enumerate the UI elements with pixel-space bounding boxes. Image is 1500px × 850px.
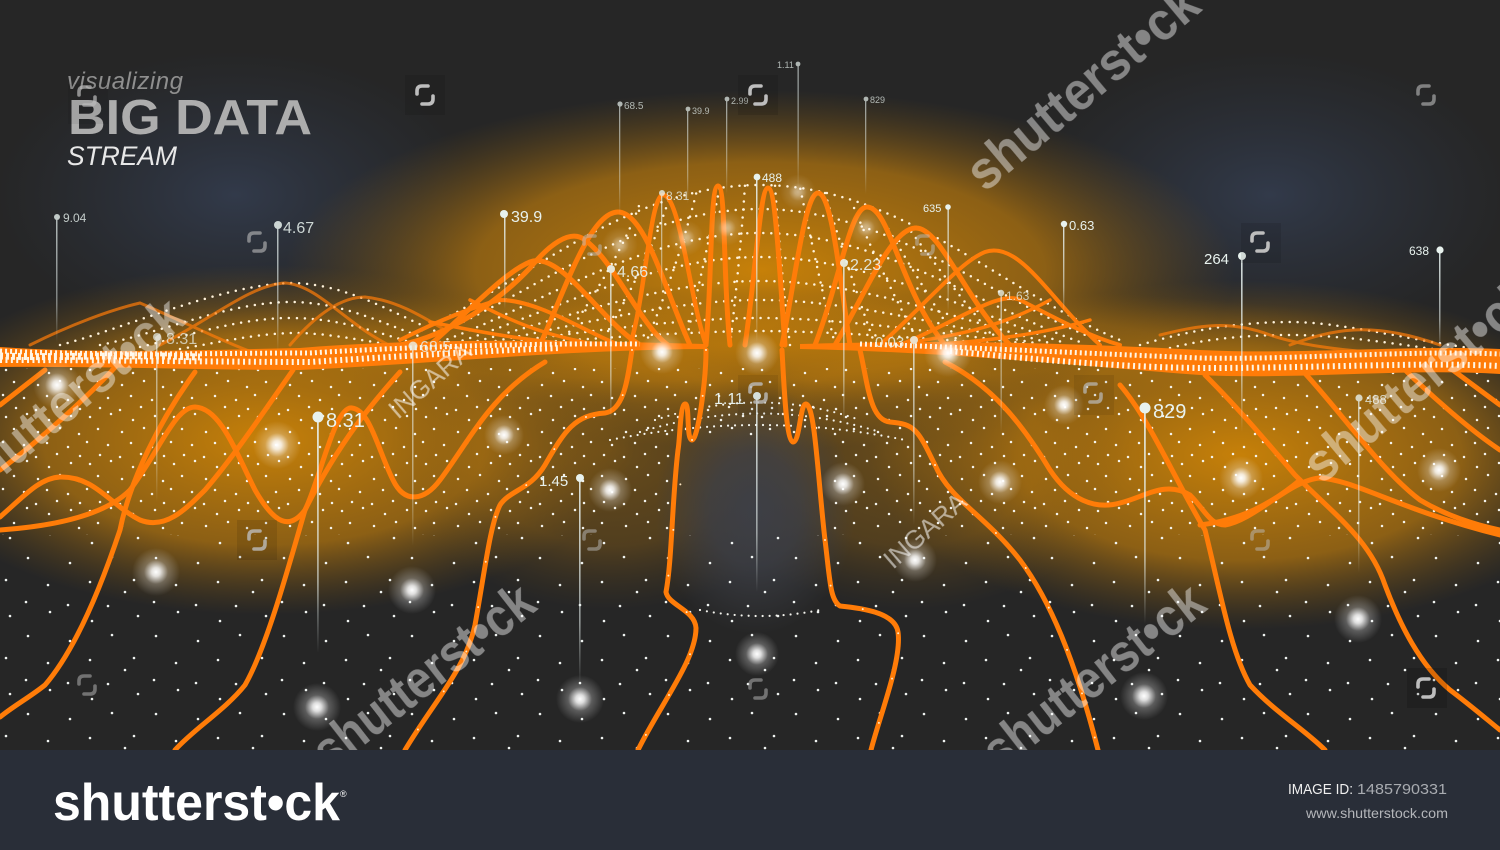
pin 8.31 dome	[659, 189, 690, 294]
pin 2.99: 2.99	[731, 96, 749, 106]
pin 4.67	[274, 220, 314, 351]
pin 829 top	[864, 95, 885, 194]
pin 1.11 centre: 1.11	[714, 391, 744, 408]
pin 1.63: 1.63	[1006, 289, 1030, 303]
pin 2.99	[725, 96, 749, 194]
title	[67, 68, 312, 171]
glow: horizon	[50, 285, 1450, 405]
pin 1.11 top: 1.11	[777, 60, 794, 70]
pin 488 right	[1355, 392, 1387, 573]
pin 0.03: 0.03	[875, 334, 904, 351]
ground dots	[0, 368, 1500, 750]
pin 8.31 left: 8.31	[166, 331, 197, 348]
image id number: 1485790331	[1357, 781, 1447, 798]
pin 638	[1409, 244, 1444, 350]
watermark bottom centre-right: shutterst•ck	[970, 571, 1217, 781]
pin 4.66	[607, 264, 648, 420]
ground wave lines	[0, 350, 1500, 750]
pin 635	[923, 203, 951, 312]
pin 488 right: 488	[1365, 392, 1387, 407]
pin 39.9 top: 39.9	[692, 106, 710, 116]
glow: centre-right ground	[690, 290, 1130, 610]
pin 264	[1204, 251, 1246, 432]
pin 68.5 top	[617, 101, 644, 215]
pin 4.67: 4.67	[283, 220, 314, 237]
horizon band	[0, 341, 1500, 376]
pin 8.31 left	[153, 331, 197, 502]
title: stream: STREAM	[67, 141, 177, 171]
pin 8.31 large: 8.31	[326, 410, 365, 432]
title: big data: BIG DATA	[68, 91, 312, 145]
title: visualizing: visualizing	[67, 68, 184, 95]
pin 1.63	[998, 289, 1030, 433]
pin 9.04: 9.04	[63, 211, 87, 225]
dome wave lines	[30, 186, 1440, 355]
pin 1.45	[539, 473, 584, 684]
pin 264: 264	[1204, 251, 1229, 268]
pin 638: 638	[1409, 244, 1429, 258]
glow: blue left	[0, 50, 475, 340]
ingara right: INGARA	[877, 486, 973, 575]
pin 68.5 top: 68.5	[624, 101, 644, 112]
pin 1.11 top	[777, 60, 800, 189]
glow: left ground	[0, 265, 635, 615]
pin 829 large: 829	[1153, 401, 1186, 423]
pin 8.31 dome: 8.31	[666, 189, 690, 203]
pin 1.45: 1.45	[539, 473, 568, 490]
footer logo: shutterst•ck	[53, 774, 340, 832]
dome dots	[60, 185, 1470, 350]
ingara left: INGARA	[382, 336, 478, 425]
registered mark: ®	[340, 789, 347, 799]
pin 0.03	[875, 334, 918, 525]
watermark logo marks	[68, 75, 1447, 708]
glow: centre ground	[390, 290, 830, 610]
line dots	[405, 350, 1098, 750]
footer bar	[0, 750, 1500, 850]
pin 1.11 centre	[714, 391, 761, 592]
pin 68.5	[408, 339, 451, 546]
pin 829 top: 829	[870, 95, 885, 105]
glow: blue right	[1030, 50, 1500, 340]
pin 39.9	[500, 209, 542, 309]
pin 488: 488	[762, 171, 782, 185]
pin 4.66: 4.66	[617, 264, 648, 281]
data pins	[54, 60, 1444, 684]
glow: dome	[285, 90, 1235, 450]
pin 2.23	[840, 257, 881, 424]
pin 2.23: 2.23	[850, 257, 881, 274]
glowing points	[33, 174, 1461, 731]
pin 0.63: 0.63	[1069, 218, 1094, 233]
pin 0.63	[1061, 218, 1094, 314]
pin 829 large	[1140, 401, 1186, 624]
ingara watermarks	[382, 336, 973, 575]
pin 8.31 large	[312, 410, 365, 653]
glow: dark centre gap	[655, 385, 855, 635]
pin 39.9: 39.9	[511, 209, 542, 226]
pin 68.5: 68.5	[420, 339, 451, 356]
website: www.shutterstock.com	[1305, 805, 1448, 821]
pin 635: 635	[923, 203, 941, 215]
image id label: IMAGE ID:	[1288, 781, 1353, 798]
pin 9.04	[54, 211, 87, 342]
pin 39.9 top	[686, 106, 710, 204]
watermark bottom centre-left: shutterst•ck	[300, 571, 547, 781]
pin 488	[754, 171, 782, 343]
glow: right ground	[870, 280, 1500, 630]
